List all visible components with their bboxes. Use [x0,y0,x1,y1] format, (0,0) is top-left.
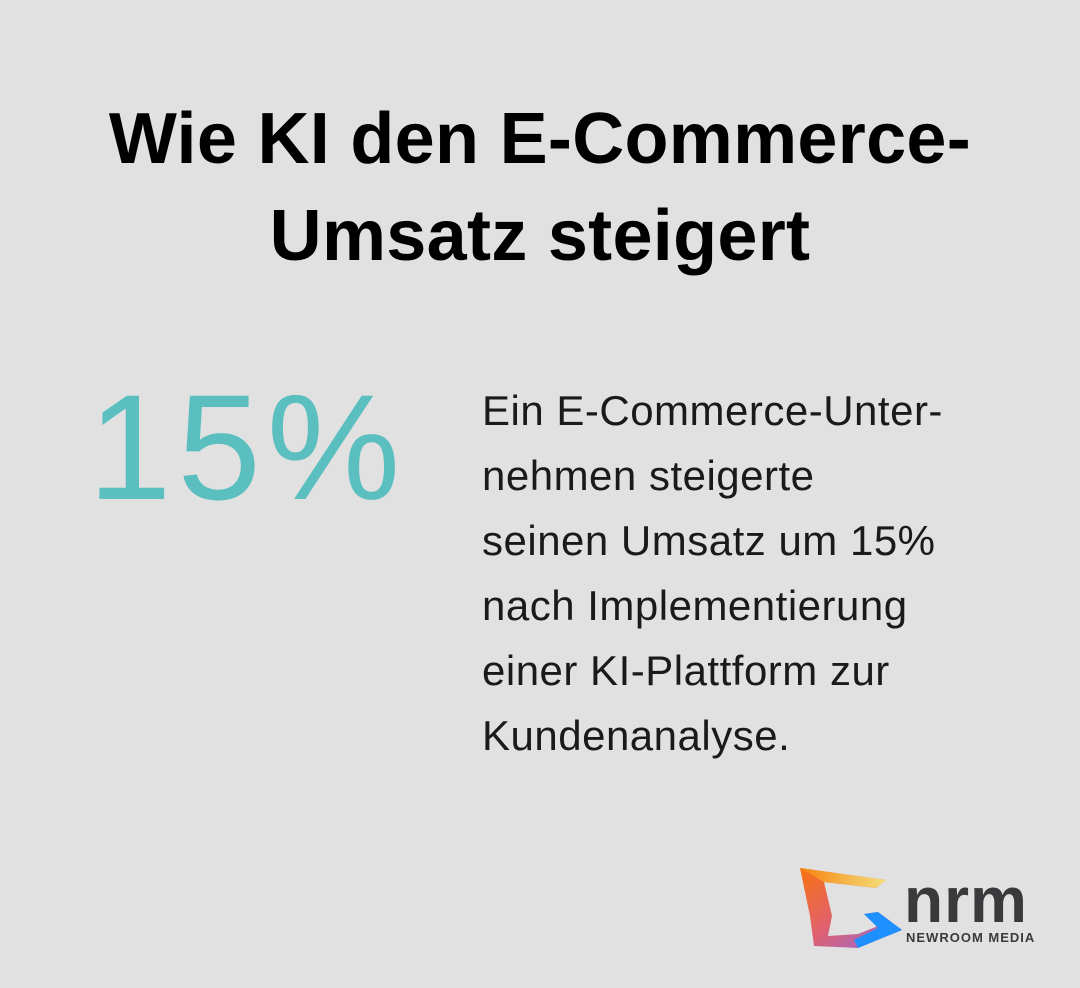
icon: logo mark [800,868,902,948]
logo text: NEWROOM MEDIA [906,930,1035,945]
description text: nehmen steigerte [482,452,815,499]
description text: Ein E-Commerce-Unter- [482,387,943,434]
description text [482,387,943,759]
description text: nach Implementierung [482,582,908,629]
description text: seinen Umsatz um 15% [482,517,936,564]
stat number: 15% [88,363,406,531]
logo text: nrm [904,866,1028,936]
description text: Kundenanalyse. [482,712,790,759]
title [109,99,971,276]
description text: einer KI-Plattform zur [482,647,890,694]
title: Umsatz steigert [270,196,810,276]
title: Wie KI den E-Commerce- [109,99,971,179]
logo [800,866,1035,948]
